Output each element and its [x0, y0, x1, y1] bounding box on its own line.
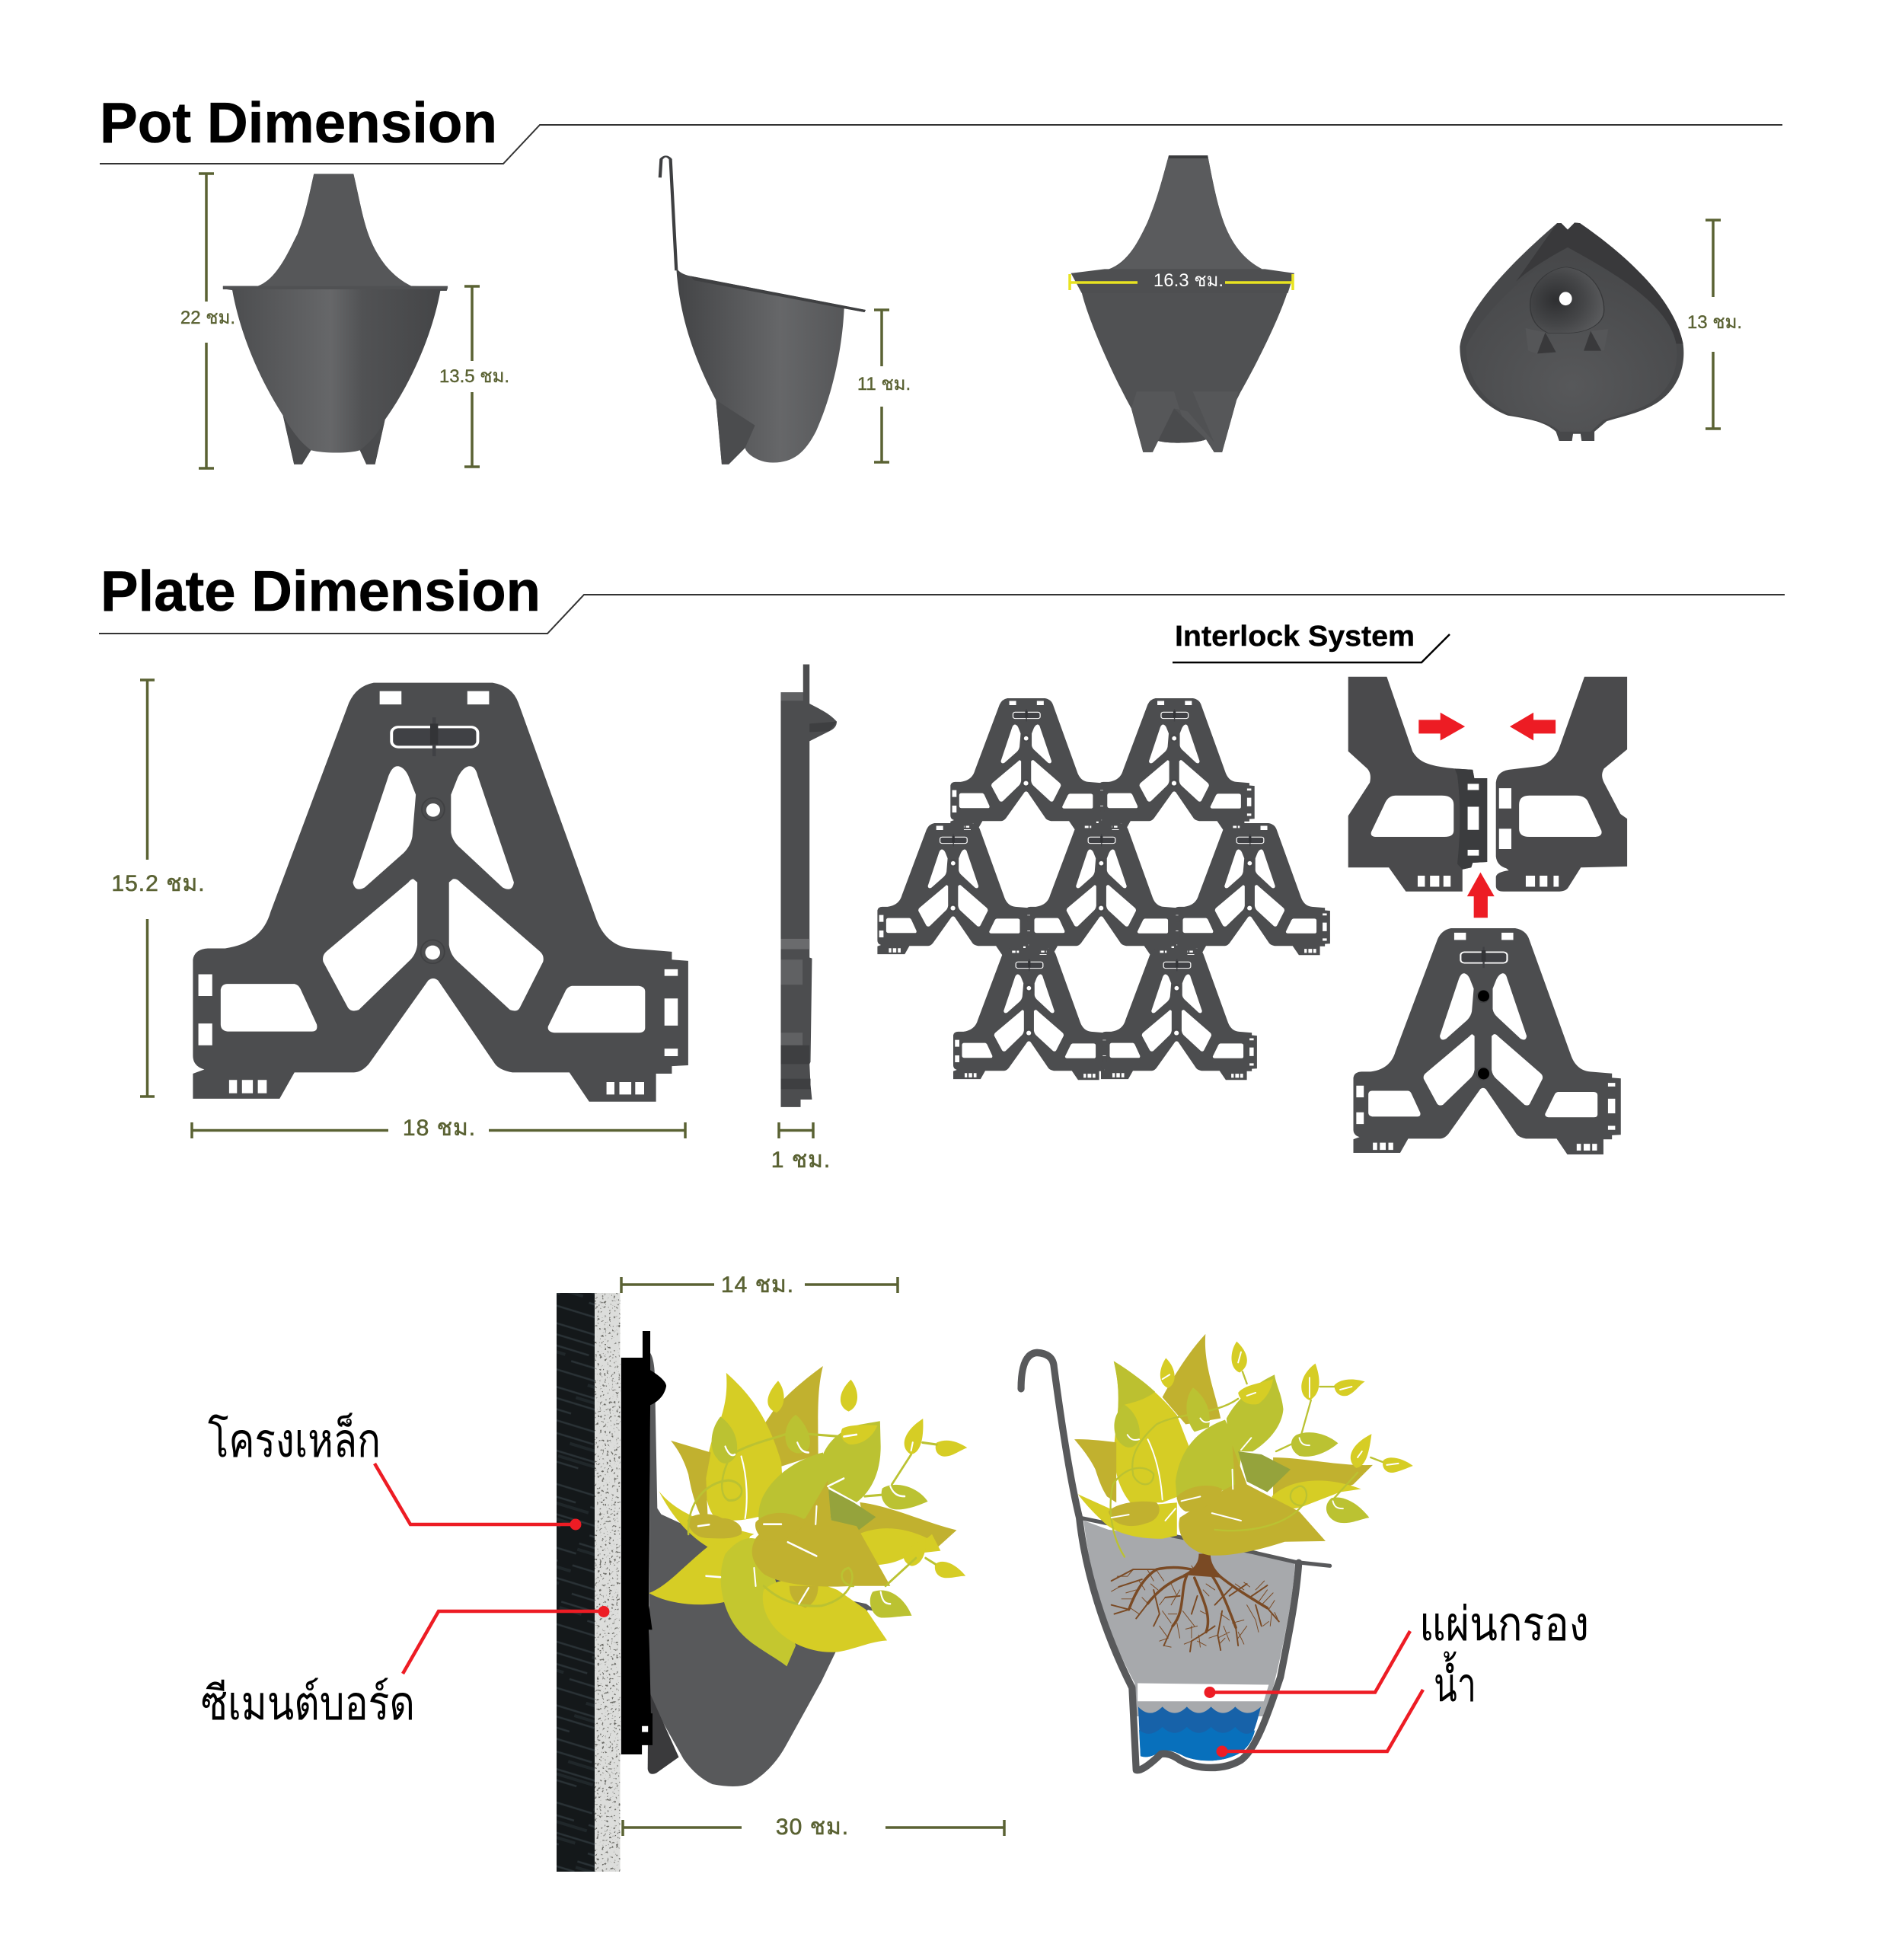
pot rim [1080, 1518, 1330, 1566]
detail: right plate piece [1496, 677, 1627, 892]
detail: left plate piece [1348, 677, 1487, 892]
wall mounting section diagram [557, 1272, 1004, 1872]
dimension 22 cm [180, 174, 235, 468]
heading rule: Pot Dimension [100, 125, 1782, 164]
pot front view with dimensions [180, 174, 509, 468]
plate row 1 [950, 698, 1255, 830]
dimension 11 cm [857, 310, 911, 462]
pot back body [1071, 155, 1294, 452]
plate row 3 [953, 948, 1257, 1080]
dimension 13.5 cm: 13.5 ชม. [439, 366, 509, 387]
plate row 2 [877, 823, 1330, 955]
detail: lower plate [1354, 928, 1621, 1154]
pot side hook [660, 156, 676, 270]
pot front body [223, 174, 448, 464]
callout: filter sheet: แผ่นกรอง [1419, 1598, 1589, 1651]
arrow: push right [1418, 713, 1465, 741]
steel frame layer [557, 1293, 595, 1872]
interlocked plates assembly [877, 698, 1330, 1080]
cross-section pot diagram [1021, 1334, 1413, 1770]
plant foliage [1074, 1334, 1413, 1556]
callout: steel frame: โครงเหล็ก [208, 1413, 381, 1467]
pot top view with dimension [1460, 220, 1742, 441]
filter sheet [1138, 1684, 1268, 1701]
roots [1112, 1554, 1279, 1652]
dimension 22 cm: 22 ชม. [180, 308, 235, 328]
pot side body [676, 268, 866, 464]
heading rule: Plate Dimension [99, 595, 1785, 634]
pot silhouette [648, 1353, 877, 1786]
dimension 14 cm [621, 1272, 898, 1298]
heading: Pot Dimension: Pot Dimension [100, 91, 497, 155]
cement board layer [595, 1293, 620, 1872]
plate side [780, 664, 837, 1107]
dimension 15.2 cm: 15.2 ชม. [111, 871, 206, 896]
plate front view with dimensions [111, 680, 688, 1141]
dimension 15.2 cm [111, 680, 206, 1097]
callout: water: น้ำ [1434, 1651, 1476, 1712]
interlock detail [1348, 677, 1627, 1154]
dimension 13 cm: 13 ชม. [1687, 312, 1742, 333]
dimension 16.3 cm: 16.3 ชม. [1154, 270, 1224, 291]
dimension 30 cm: 30 ชม. [776, 1815, 849, 1840]
dimension 18 cm: 18 ชม. [403, 1116, 476, 1141]
dimension 16.3 cm [1070, 270, 1293, 291]
dimension 18 cm [192, 1116, 685, 1141]
sub-heading: Interlock System: Interlock System [1175, 621, 1415, 653]
plate section [621, 1331, 666, 1754]
plate side view with dimension [771, 664, 837, 1173]
pot side view with dimension [660, 156, 911, 464]
callout: cement board [201, 1606, 609, 1730]
pot back view with width dimension [1070, 155, 1294, 452]
dimension 14 cm: 14 ชม. [721, 1272, 794, 1298]
dimension 30 cm [623, 1815, 1004, 1840]
plant foliage [649, 1366, 967, 1666]
sub-heading rule: Interlock System [1173, 634, 1450, 662]
pot wall and hook [1021, 1352, 1299, 1770]
soil [1083, 1521, 1295, 1716]
callout: filter sheet [1205, 1598, 1589, 1698]
dimension 13.5 cm [439, 286, 509, 467]
dimension 1 cm: 1 ชม. [771, 1148, 831, 1173]
plate front [193, 683, 688, 1102]
pot section and plant [621, 1331, 967, 1786]
heading: Plate Dimension: Plate Dimension [101, 559, 541, 623]
dimension 13 cm [1687, 220, 1742, 429]
pot top body [1460, 222, 1683, 441]
water [1138, 1706, 1261, 1760]
arrow: push up [1467, 873, 1495, 918]
arrow: push left [1510, 713, 1556, 741]
dimension 1 cm [771, 1122, 831, 1173]
dimension 11 cm: 11 ชม. [857, 374, 911, 394]
callout: steel frame [208, 1413, 582, 1531]
callout: cement board: ซีเมนต์บอร์ด [201, 1677, 415, 1730]
callout: water [1217, 1651, 1476, 1757]
